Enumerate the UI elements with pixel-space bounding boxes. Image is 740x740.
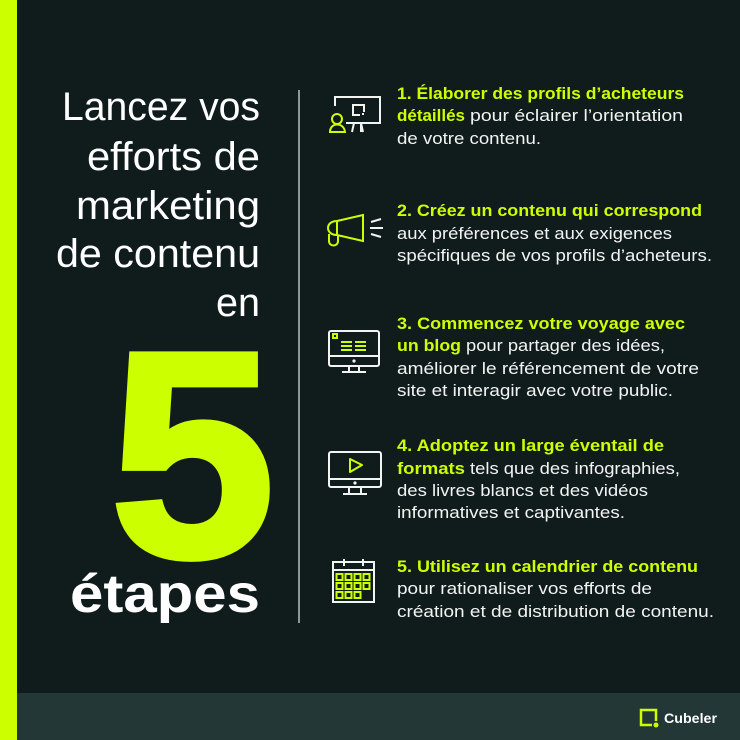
step 1 [330, 84, 684, 148]
step 4 text [397, 436, 680, 522]
step 1 text: de votre contenu. [397, 129, 541, 148]
step 3 text: 3. Commencez votre voyage avec [397, 314, 685, 333]
step 1 text: détaillés [397, 106, 465, 125]
step 2 [328, 201, 712, 265]
icon: monitor with blog [329, 331, 379, 372]
step 5 text: 5. Utilisez un calendrier de contenu [397, 557, 698, 576]
logo: Cubeler [641, 710, 718, 728]
step 4 text: des livres blancs et des vidéos [397, 481, 648, 500]
title: en [216, 281, 260, 325]
step 2 text [397, 201, 712, 265]
left accent bar [0, 0, 17, 740]
step 3 text [397, 314, 699, 400]
step 2 text: 2. Créez un contenu qui correspond [397, 201, 702, 220]
step 2 text: aux préférences et aux exigences [397, 224, 672, 243]
vertical divider [298, 90, 300, 623]
step 3 text: un blog [397, 336, 461, 355]
step 4 text: informatives et captivantes. [397, 503, 625, 522]
logo wordmark: Cubeler [664, 710, 718, 726]
step 4 text: tels que des infographies, [470, 459, 680, 478]
step 4 text: 4. Adoptez un large éventail de [397, 436, 664, 455]
title [56, 85, 260, 325]
big number 5: 5 [110, 292, 275, 619]
step 1 text [397, 84, 684, 148]
icon: presentation board with person [330, 97, 380, 132]
title word: étapes: étapes [70, 564, 260, 624]
step 5 text: pour rationaliser vos efforts de [397, 579, 652, 598]
icon: megaphone [328, 215, 383, 246]
step 3 [329, 314, 699, 400]
step 5 text [397, 557, 714, 621]
title: Lancez vos [62, 85, 260, 129]
title: de contenu [56, 232, 260, 276]
step 3 text: améliorer le référencement de votre [397, 359, 699, 378]
icon: calendar [333, 559, 374, 602]
step 1 text: pour éclairer l’orientation [470, 106, 683, 125]
step 5 text: création et de distribution de contenu. [397, 602, 714, 621]
step 3 text: site et interagir avec votre public. [397, 381, 673, 400]
step 4 text: formats [397, 459, 465, 478]
title: marketing [76, 184, 260, 228]
step 3 text: pour partager des idées, [466, 336, 665, 355]
step 4 [329, 436, 680, 522]
step 1 text: 1. Élaborer des profils d’acheteurs [397, 84, 684, 103]
footer band [17, 693, 740, 740]
title: efforts de [87, 135, 260, 179]
step 2 text: spécifiques de vos profils d’acheteurs. [397, 246, 712, 265]
step 5 [333, 557, 714, 621]
logo mark [641, 710, 658, 728]
icon: monitor with play button [329, 452, 381, 494]
